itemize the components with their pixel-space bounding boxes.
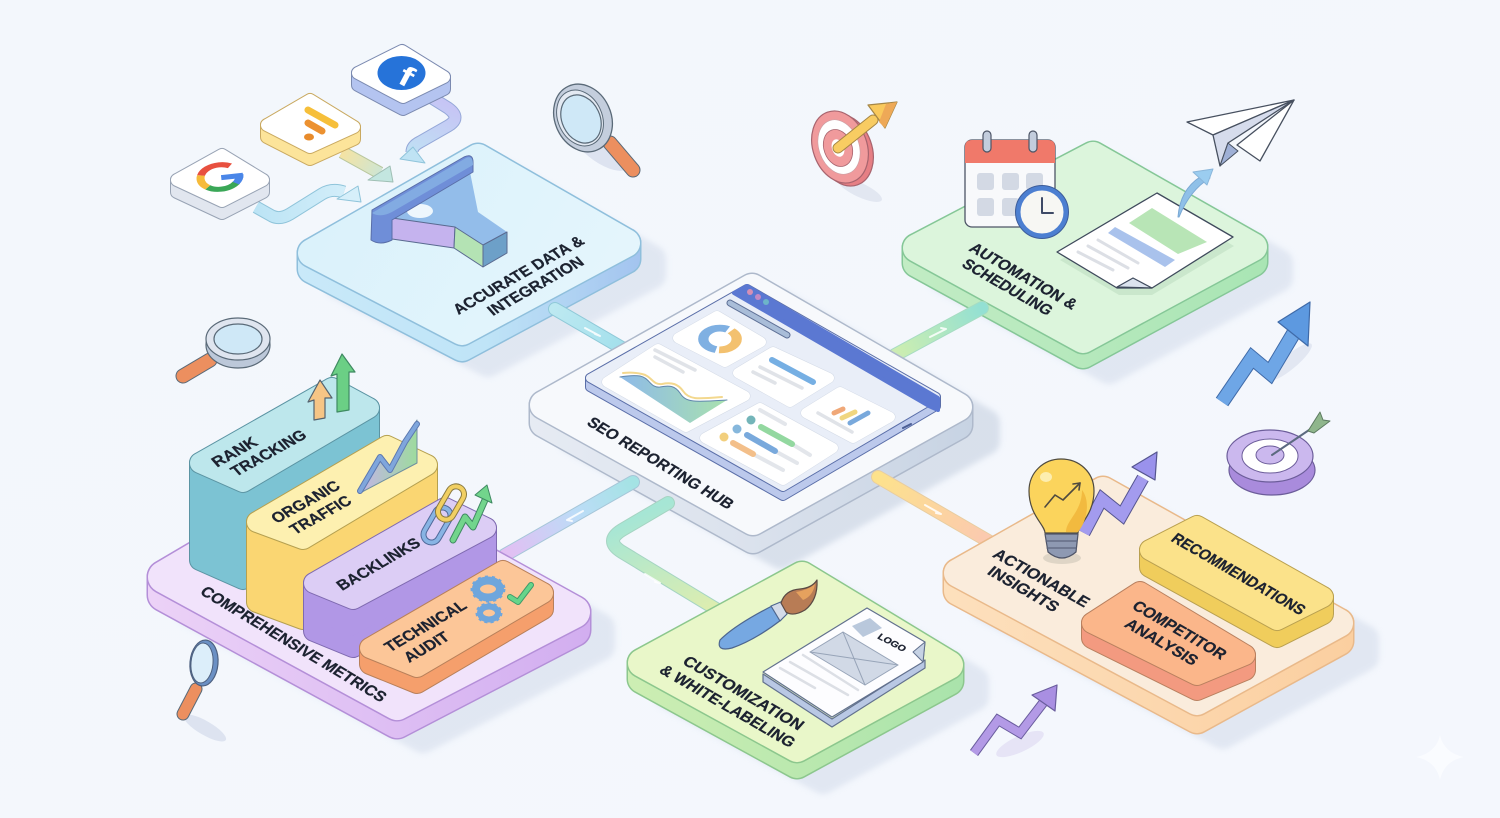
icon: gears and check bbox=[472, 577, 531, 622]
icon: rank arrows up bbox=[308, 354, 355, 420]
connector: automation to hub bbox=[895, 308, 982, 355]
icon: google tile bbox=[177, 155, 263, 213]
icon: light bulb bbox=[1029, 459, 1094, 564]
label: backlinks: BACKLINKS bbox=[333, 535, 425, 594]
bar chart card bbox=[806, 392, 890, 438]
label: recommendations: RECOMMENDATIONS bbox=[1167, 531, 1309, 619]
label: logo: LOGO bbox=[875, 632, 908, 654]
panel: customization and white-labeling bbox=[642, 576, 975, 780]
icon: backlink arrow bbox=[453, 485, 492, 540]
list card bbox=[738, 352, 829, 402]
icon: chain links bbox=[421, 483, 467, 545]
label: customization and white-labeling: CUSTOMIZATION bbox=[679, 653, 807, 734]
arrow: google to funnel bbox=[256, 186, 361, 218]
icon: purple growth arrow bbox=[974, 685, 1057, 762]
label: organic traffic: TRAFFIC bbox=[287, 493, 356, 538]
icon: magnifying glass bottom bbox=[181, 639, 229, 746]
panel: actionable insights bbox=[958, 452, 1365, 735]
arrow: analytics to funnel bbox=[342, 152, 393, 182]
icon: magnifying glass left bbox=[183, 318, 270, 376]
label: rank tracking: TRACKING bbox=[228, 427, 311, 480]
label: organic traffic: ORGANIC bbox=[268, 478, 344, 527]
arrow: report to plane bbox=[1178, 169, 1213, 217]
label: technical audit: TECHNICAL bbox=[381, 598, 471, 656]
icon: sparkle watermark bbox=[1416, 735, 1464, 780]
label: accurate data and integration: INTEGRATION bbox=[484, 254, 588, 319]
connector: hub to customization bbox=[613, 503, 716, 609]
panel: comprehensive metrics bbox=[164, 354, 600, 738]
icon: analytics tile bbox=[267, 100, 354, 159]
icon: facebook tile: f bbox=[393, 60, 420, 94]
progress list card bbox=[705, 408, 833, 480]
icon: facebook tile bbox=[358, 51, 444, 109]
label: actionable insights: INSIGHTS bbox=[984, 564, 1063, 616]
label: automation and scheduling: AUTOMATION & bbox=[965, 240, 1081, 313]
label: technical audit: AUDIT bbox=[400, 629, 454, 666]
connector: hub to actionable insights bbox=[878, 477, 990, 542]
label: customization and white-labeling: & WHITE-LABELING bbox=[655, 662, 799, 751]
block: technical audit bbox=[370, 571, 543, 683]
block: rank tracking bbox=[200, 388, 369, 579]
area chart card bbox=[607, 349, 745, 427]
panel: accurate data and integration bbox=[312, 156, 652, 363]
icon: calendar bbox=[965, 131, 1055, 227]
label: accurate data and integration: ACCURATE DATA & bbox=[450, 233, 588, 318]
connector: accurate data to hub bbox=[555, 309, 622, 348]
icon: purple target bbox=[1227, 412, 1330, 495]
icon: target with yellow arrow bbox=[802, 102, 897, 206]
screen header bar bbox=[734, 286, 938, 410]
label: organic traffic bbox=[268, 478, 356, 538]
icon: funnel bbox=[371, 156, 507, 267]
icon: blue growth arrow bbox=[1222, 302, 1316, 402]
block: recommendations bbox=[1150, 526, 1323, 637]
icon: branded document bbox=[763, 608, 925, 727]
label: rank tracking: RANK bbox=[208, 434, 262, 471]
icon: report document bbox=[1057, 193, 1234, 295]
donut chart card bbox=[678, 316, 761, 362]
label: competitor analysis: COMPETITOR bbox=[1128, 598, 1230, 663]
panel: automation and scheduling bbox=[917, 131, 1279, 370]
block: competitor analysis bbox=[1092, 592, 1245, 690]
icon: paint brush bbox=[719, 580, 817, 649]
icon: organic chart bbox=[360, 420, 417, 493]
label: SEO reporting hub: SEO REPORTING HUB bbox=[583, 415, 737, 513]
icon: paper plane bbox=[1187, 100, 1294, 166]
dashboard screen bbox=[590, 286, 938, 496]
connector: hub to comprehensive metrics bbox=[505, 482, 633, 555]
label: automation and scheduling: SCHEDULING bbox=[958, 256, 1056, 319]
icon: magnifying glass top bbox=[543, 74, 633, 178]
block: backlinks bbox=[314, 483, 492, 647]
icon: insight arrow bbox=[1084, 452, 1157, 533]
label: competitor analysis: ANALYSIS bbox=[1121, 616, 1201, 669]
label: comprehensive metrics: COMPREHENSIVE METRICS bbox=[196, 584, 390, 706]
arrow: facebook to funnel bbox=[400, 98, 455, 163]
block: organic traffic bbox=[257, 420, 427, 619]
label: actionable insights: ACTIONABLE bbox=[989, 546, 1093, 611]
panel: SEO reporting hub bbox=[544, 286, 986, 555]
icon: clock bbox=[1016, 186, 1068, 238]
